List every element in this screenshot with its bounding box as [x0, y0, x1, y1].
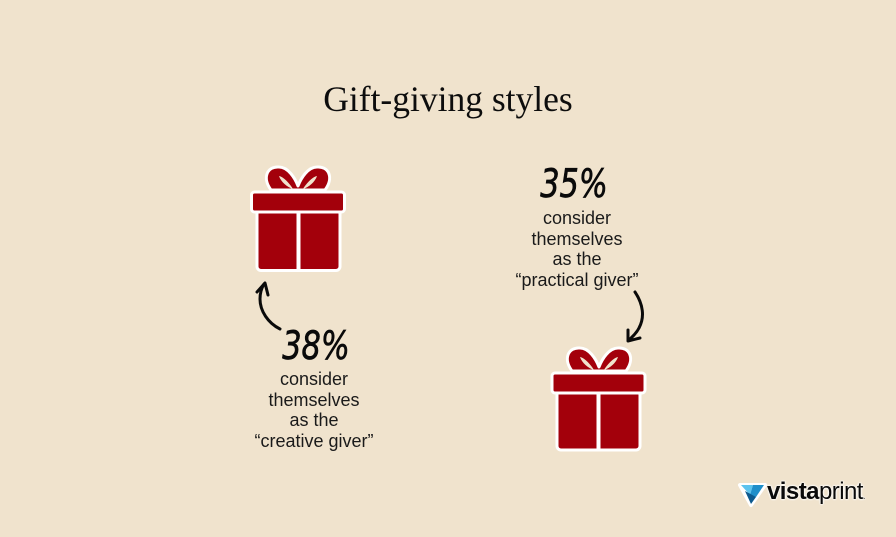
icon: gift right — [552, 348, 645, 450]
text: practical giver: consider — [543, 208, 611, 228]
stat: 35%: 35% — [540, 162, 608, 207]
title: Gift-giving styles — [323, 79, 573, 119]
arrow: to right gift — [628, 292, 642, 341]
icon: gift left — [252, 167, 344, 270]
text: creative giver: themselves — [268, 390, 360, 410]
logo text: vistaprint: vistaprint. — [767, 478, 865, 505]
text: creative giver: consider — [280, 369, 348, 389]
arrow: to left gift — [257, 283, 280, 329]
text: practical giver: themselves — [531, 229, 623, 249]
logo mark: vistaprint — [740, 485, 765, 505]
text: practical giver: as the — [552, 249, 602, 269]
text: practical giver — [515, 208, 639, 290]
text: practical giver: “practical giver” — [515, 270, 639, 290]
stat: 38%: 38% — [282, 324, 350, 369]
text: creative giver: as the — [289, 410, 339, 430]
text: creative giver — [254, 369, 374, 451]
text: creative giver: “creative giver” — [254, 431, 374, 451]
